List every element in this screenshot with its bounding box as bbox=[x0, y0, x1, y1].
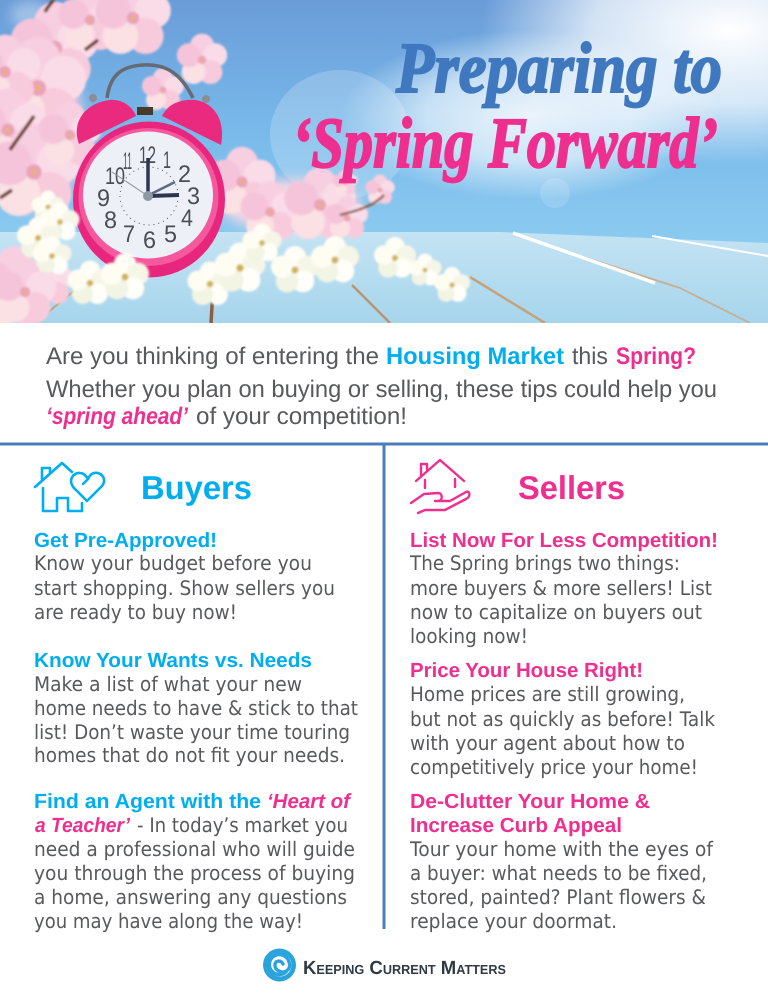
tip: price your house: competitively price your home! bbox=[410, 755, 698, 779]
tip: price your house: but not as quickly as before! Talk bbox=[410, 707, 715, 731]
heading: sellers: Sellers bbox=[518, 469, 625, 506]
tip: find an agent: you through the process of buying bbox=[34, 861, 355, 885]
tip: price your house bbox=[410, 659, 715, 779]
cherry blossoms: right branch bbox=[208, 147, 395, 240]
clock numerals: 5 bbox=[164, 221, 177, 248]
tip: de-clutter: replace your doormat. bbox=[410, 909, 617, 933]
clock numerals: 11 bbox=[123, 148, 132, 175]
tip: list now: looking now! bbox=[410, 624, 528, 648]
panel: sellers bbox=[409, 460, 718, 933]
heading: buyers: Buyers bbox=[141, 469, 252, 506]
tip: de-clutter: a buyer: what needs to be fixed, bbox=[410, 861, 707, 885]
clock bells bbox=[77, 94, 222, 145]
clock numerals: 6 bbox=[143, 227, 156, 254]
clock numerals: 4 bbox=[181, 205, 193, 232]
hero photo banner bbox=[0, 0, 768, 326]
clock numerals: 9 bbox=[97, 185, 110, 212]
tip: get pre-approved: Know your budget before you bbox=[34, 551, 312, 575]
tip: de-clutter bbox=[409, 790, 714, 933]
tip: find an agent: Find an Agent with the bbox=[34, 790, 261, 813]
tip: wants vs needs: list! Don’t waste your time touring bbox=[34, 720, 350, 744]
tip: price your house: Home prices are still growing, bbox=[410, 682, 685, 706]
intro text bbox=[46, 343, 717, 430]
tip: wants vs needs: homes that do not fit your needs. bbox=[34, 743, 345, 767]
icon: swirl bbox=[263, 948, 296, 982]
tip: de-clutter: Increase Curb Appeal bbox=[410, 814, 622, 837]
intro text: Housing Market bbox=[386, 343, 564, 370]
tip: list now: List Now For Less Competition! bbox=[410, 529, 718, 552]
tip: wants vs needs: Make a list of what your new bbox=[34, 672, 302, 696]
tip: wants vs needs: home needs to have & stick to that bbox=[34, 696, 358, 720]
intro text: Are you thinking of entering the bbox=[46, 343, 379, 370]
tip: get pre-approved: start shopping. Show sellers you bbox=[34, 576, 335, 600]
wooden table bbox=[0, 232, 768, 323]
tip: wants vs needs bbox=[34, 649, 358, 767]
clock numerals: 10 bbox=[105, 163, 125, 190]
panel: buyers bbox=[34, 463, 358, 933]
clock body bbox=[73, 122, 225, 278]
logo: keeping current matters bbox=[263, 948, 506, 982]
clock numerals: 2 bbox=[178, 161, 191, 188]
tip: de-clutter: De-Clutter Your Home & bbox=[410, 790, 650, 813]
title line 1: Preparing to bbox=[395, 28, 722, 108]
clock numerals: 3 bbox=[187, 183, 200, 210]
clock numerals bbox=[98, 146, 199, 248]
tip: find an agent: a home, answering any questions bbox=[34, 885, 347, 909]
tip: find an agent: - In today’s market you bbox=[137, 813, 348, 837]
icon: house with heart bbox=[35, 463, 104, 511]
title bbox=[292, 28, 722, 183]
tip: find an agent: need a professional who will guide bbox=[34, 837, 355, 861]
intro text: of your competition! bbox=[196, 403, 407, 430]
tip: list now: now to capitalize on buyers out bbox=[410, 600, 702, 624]
white blossoms bbox=[0, 190, 470, 322]
tip: get pre-approved: are ready to buy now! bbox=[34, 600, 237, 624]
sunlight glow bbox=[10, 0, 768, 208]
clock face bbox=[83, 132, 213, 258]
wordmark: Keeping Current Matters bbox=[303, 958, 506, 979]
vertical divider bbox=[382, 444, 386, 929]
cherry blossoms: left branch bbox=[0, 0, 227, 326]
intro text: this bbox=[572, 343, 608, 370]
tip: de-clutter: stored, painted? Plant flowers & bbox=[410, 885, 706, 909]
tip: find an agent: a Teacher’ bbox=[35, 814, 130, 837]
tip: de-clutter: Tour your home with the eyes of bbox=[409, 837, 714, 861]
clock numerals: 12 bbox=[139, 142, 156, 169]
tip: list now: The Spring brings two things: bbox=[409, 551, 680, 575]
tip: get pre-approved bbox=[34, 529, 335, 624]
tip: wants vs needs: Know Your Wants vs. Needs bbox=[34, 649, 312, 672]
intro text: Spring? bbox=[616, 343, 696, 370]
clock hands bbox=[112, 158, 179, 225]
intro text: ‘spring ahead’ bbox=[46, 403, 188, 430]
clock numerals: 1 bbox=[163, 147, 171, 174]
horizontal divider bbox=[0, 442, 768, 446]
clock numerals: 8 bbox=[104, 207, 117, 234]
clock numerals: 7 bbox=[123, 221, 135, 248]
tip: get pre-approved: Get Pre-Approved! bbox=[34, 529, 217, 552]
tip: price your house: with your agent about how to bbox=[410, 731, 685, 755]
clock handle bbox=[107, 65, 193, 98]
tip: list now: more buyers & more sellers! List bbox=[410, 576, 712, 600]
tip: find an agent: you may have along the way! bbox=[34, 909, 303, 933]
icon: house on hand bbox=[411, 460, 469, 513]
tip: find an agent bbox=[34, 790, 355, 933]
sky background bbox=[0, 0, 768, 243]
intro text: Whether you plan on buying or selling, these tips could help you bbox=[46, 376, 717, 403]
tip: find an agent: ‘Heart of bbox=[267, 790, 352, 813]
tip: list now bbox=[409, 529, 718, 648]
alarm clock bbox=[73, 65, 225, 278]
tip: price your house: Price Your House Right! bbox=[410, 659, 643, 682]
